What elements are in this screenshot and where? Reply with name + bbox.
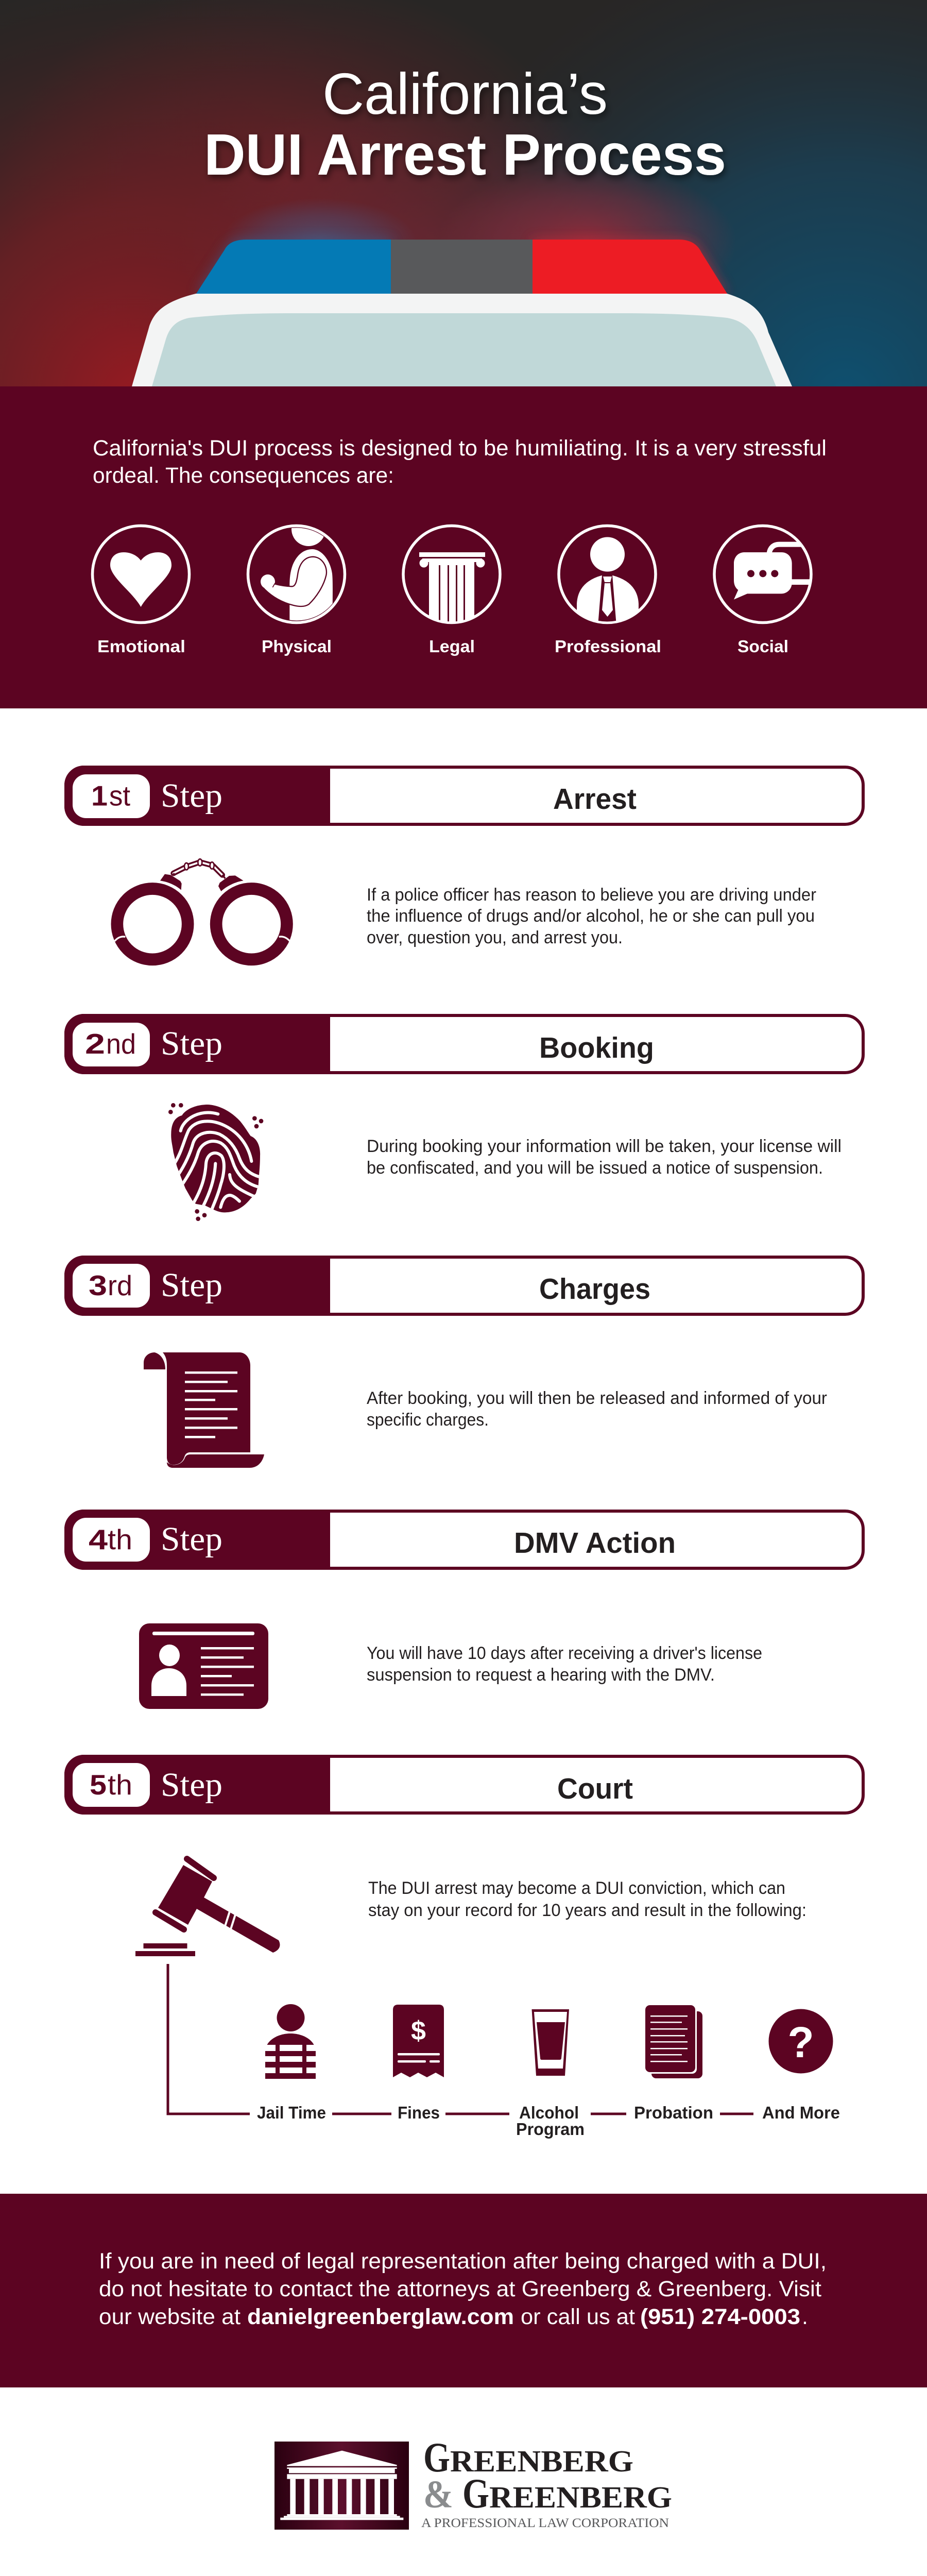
step 3 header bar (64, 1256, 863, 1316)
contact text: (951) 274-0003 (640, 2304, 800, 2329)
icon: professional person (559, 526, 656, 626)
label: alcohol program: Program (516, 2120, 585, 2139)
icon: social speech bubbles (714, 526, 814, 622)
step 4 header bar: DMV Action (514, 1527, 676, 1560)
label: and more: And More (762, 2103, 840, 2122)
logo wordmark: G (423, 2434, 450, 2481)
step 2 text: be confiscated, and you will be issued a notice of suspension. (367, 1158, 823, 1178)
icon: question mark (768, 2009, 833, 2073)
step 1 header bar (64, 766, 863, 826)
contact text: . (802, 2304, 808, 2329)
icon: alcohol glass (531, 2009, 569, 2076)
intro text: ordeal. The consequences are: (93, 463, 394, 488)
step 4 header bar: Step (161, 1520, 222, 1558)
label: alcohol program (516, 2103, 585, 2139)
logo wordmark: A PROFESSIONAL LAW CORPORATION (421, 2516, 669, 2530)
step 5 header bar: Court (557, 1772, 633, 1805)
step 3 header bar: rd (108, 1269, 132, 1301)
step 3 text (367, 1388, 827, 1430)
intro text (93, 436, 827, 488)
step 1 header bar: st (109, 780, 130, 812)
title (204, 61, 726, 187)
logo mark: temple (274, 2442, 409, 2530)
step 4 text: You will have 10 days after receiving a driver's license (367, 1643, 762, 1663)
panel: step 1 arrest (64, 766, 863, 959)
panel: step 3 charges (64, 1256, 863, 1468)
step 2 header bar: nd (106, 1028, 136, 1060)
step 1 text: over, question you, and arrest you. (367, 928, 623, 947)
step 3 header bar: Charges (539, 1273, 650, 1306)
step 1 text: the influence of drugs and/or alcohol, he or she can pull you (367, 906, 815, 926)
logo wordmark: G (462, 2470, 489, 2517)
panel: step 2 booking (64, 1014, 863, 1221)
icon: handcuffs (115, 859, 290, 959)
label: physical: Physical (262, 637, 332, 656)
step 2 header bar: Booking (539, 1031, 654, 1064)
icon: fingerprint (168, 1103, 263, 1221)
contact text: If you are in need of legal representation after being charged with a DUI, (99, 2249, 827, 2274)
icon: physical arm (248, 512, 345, 623)
panel: consequences (0, 386, 927, 708)
contact text: or call us at (521, 2304, 635, 2329)
contact text: do not hesitate to contact the attorneys at Greenberg & Greenberg. Visit (99, 2277, 821, 2301)
step 1 header bar: 1 (91, 780, 108, 812)
icon: document scroll (144, 1352, 264, 1468)
logo wordmark: REENBERG (489, 2480, 672, 2514)
logo: Greenberg & Greenberg (274, 2434, 672, 2530)
logo wordmark: & (423, 2473, 453, 2516)
step 4 header bar: 4 (89, 1523, 108, 1555)
logo wordmark: REENBERG (450, 2444, 633, 2478)
step 4 text: suspension to request a hearing with the DMV. (367, 1665, 715, 1685)
icon: jail time prisoner (265, 2004, 316, 2079)
label: emotional: Emotional (97, 637, 185, 656)
icon: gavel (135, 1859, 280, 1956)
step 4 header bar (64, 1510, 863, 1570)
car roof and windshield (132, 294, 792, 386)
step 3 header bar: Step (161, 1266, 222, 1304)
step 5 header bar (64, 1755, 863, 1815)
step 3 text: specific charges. (367, 1410, 489, 1430)
contact text: our website at (99, 2304, 241, 2329)
label: social: Social (737, 637, 788, 656)
step 5 header bar: Step (161, 1766, 222, 1804)
step 2 header bar: Step (161, 1025, 222, 1062)
step 1 header bar: Step (161, 777, 222, 815)
intro text: California's DUI process is designed to be humiliating. It is a very stressful (93, 436, 827, 461)
label: alcohol program: Alcohol (519, 2103, 579, 2122)
step 1 header bar: Arrest (553, 783, 637, 816)
connector lines (168, 1964, 753, 2114)
icon: fines receipt: $ (411, 2016, 426, 2046)
step 2 header bar: 2 (85, 1028, 105, 1060)
panel: step 5 court (64, 1755, 863, 2139)
contact text: danielgreenberglaw.com (247, 2304, 514, 2329)
title: California’s (322, 61, 608, 126)
step 3 text: After booking, you will then be released and informed of your (367, 1388, 827, 1408)
contact text (99, 2249, 827, 2329)
step 5 header bar: th (108, 1769, 132, 1801)
step 5 text (368, 1878, 806, 1920)
panel: call to action footer (0, 2194, 927, 2387)
step 2 text (367, 1137, 842, 1178)
panel: step 4 DMV action (64, 1510, 863, 1709)
step 2 text: During booking your information will be taken, your license will (367, 1137, 842, 1156)
title: DUI Arrest Process (204, 122, 726, 187)
logo wordmark (421, 2434, 672, 2530)
step 4 header bar: th (108, 1523, 132, 1555)
step 5 text: The DUI arrest may become a DUI conviction, which can (368, 1878, 785, 1898)
step 3 header bar: 3 (89, 1269, 107, 1301)
step 5 header bar: 5 (90, 1769, 107, 1801)
label: jail time: Jail Time (257, 2103, 326, 2122)
icon: question mark: ? (787, 2018, 814, 2066)
icon: driver's license (139, 1623, 268, 1709)
step 1 text: If a police officer has reason to believe you are driving under (367, 885, 816, 905)
icon: legal column (403, 526, 500, 628)
icon: fines receipt (393, 2005, 444, 2077)
icon: probation documents (644, 2004, 702, 2078)
label: legal: Legal (429, 637, 475, 656)
label: fines: Fines (398, 2103, 440, 2122)
step 4 text (367, 1643, 762, 1685)
step 5 text: stay on your record for 10 years and result in the following: (368, 1901, 806, 1920)
label: probation: Probation (634, 2103, 713, 2122)
label: professional: Professional (555, 637, 661, 656)
panel: header police car scene (0, 0, 927, 397)
icon: emotional heart (93, 526, 190, 622)
step 1 text (367, 885, 816, 947)
light bar (196, 240, 727, 294)
step 2 header bar (64, 1014, 863, 1074)
